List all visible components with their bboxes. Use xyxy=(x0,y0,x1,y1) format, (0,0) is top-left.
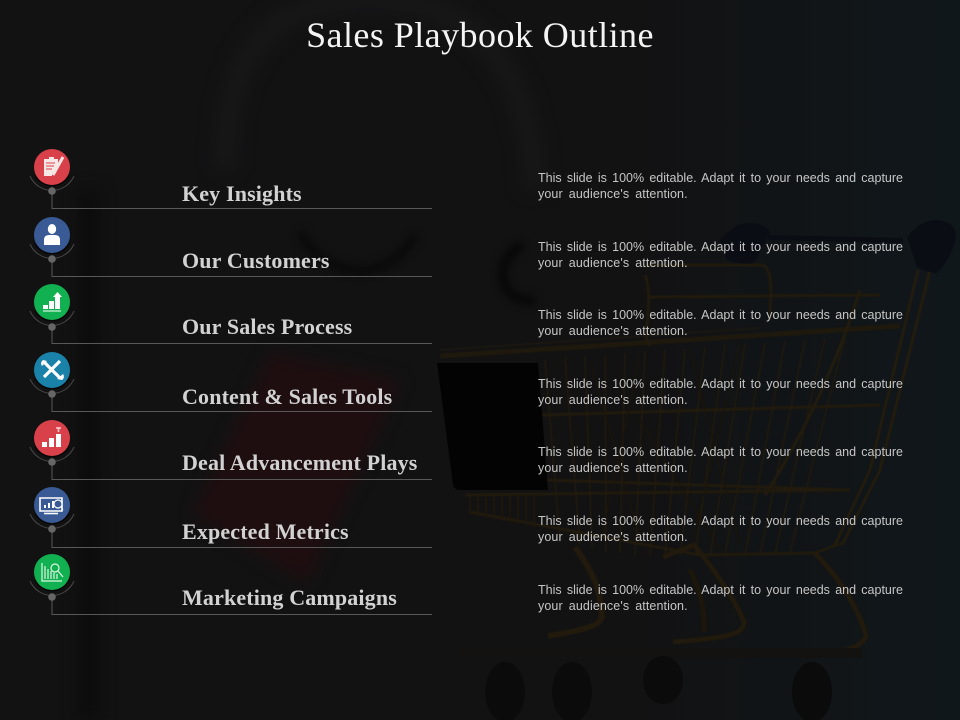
description: This slide is 100% editable. Adapt it to your needs and capture xyxy=(538,171,903,185)
description: your audience's attention. xyxy=(538,393,688,407)
description: your audience's attention. xyxy=(538,461,688,475)
description: your audience's attention. xyxy=(538,324,688,338)
cart child-seat panel xyxy=(437,363,548,490)
label: Expected Metrics xyxy=(182,519,349,544)
item: Our Sales Process xyxy=(30,284,903,344)
description: This slide is 100% editable. Adapt it to your needs and capture xyxy=(538,240,903,254)
item: Our Customers xyxy=(30,217,903,277)
icon: person in blue circle xyxy=(30,217,432,277)
description xyxy=(538,171,903,201)
cart handle xyxy=(720,220,956,273)
icon: chart with magnifier in green circle xyxy=(30,554,432,615)
icon: crossed tools in teal circle xyxy=(30,352,432,412)
item: Content & Sales Tools xyxy=(30,352,903,412)
description: your audience's attention. xyxy=(538,187,688,201)
item: Deal Advancement Plays xyxy=(30,420,903,480)
icon: clipboard in red circle xyxy=(30,149,432,209)
description xyxy=(538,240,903,270)
label: Content & Sales Tools xyxy=(182,384,392,409)
description: This slide is 100% editable. Adapt it to your needs and capture xyxy=(538,514,903,528)
description xyxy=(538,308,903,338)
label: Deal Advancement Plays xyxy=(182,450,418,475)
label: Key Insights xyxy=(182,181,302,206)
icon: bars with figure in red circle xyxy=(30,420,432,480)
description: your audience's attention. xyxy=(538,530,688,544)
cart wheels xyxy=(460,648,862,720)
description: This slide is 100% editable. Adapt it to your needs and capture xyxy=(538,308,903,322)
title: Sales Playbook Outline xyxy=(306,15,654,55)
item: Key Insights xyxy=(30,149,903,209)
label: Our Customers xyxy=(182,248,330,273)
description: your audience's attention. xyxy=(538,256,688,270)
description: your audience's attention. xyxy=(538,599,688,613)
icon: monitor with magnifier in blue circle xyxy=(30,487,432,548)
item: Expected Metrics xyxy=(30,487,903,548)
label: Our Sales Process xyxy=(182,314,352,339)
item: Marketing Campaigns xyxy=(30,554,903,615)
description xyxy=(538,445,903,475)
description: This slide is 100% editable. Adapt it to your needs and capture xyxy=(538,377,903,391)
description: This slide is 100% editable. Adapt it to your needs and capture xyxy=(538,445,903,459)
description xyxy=(538,514,903,544)
description: This slide is 100% editable. Adapt it to your needs and capture xyxy=(538,583,903,597)
label: Marketing Campaigns xyxy=(182,585,397,610)
description xyxy=(538,377,903,407)
description xyxy=(538,583,903,613)
icon: rising bars in green circle xyxy=(30,284,432,344)
